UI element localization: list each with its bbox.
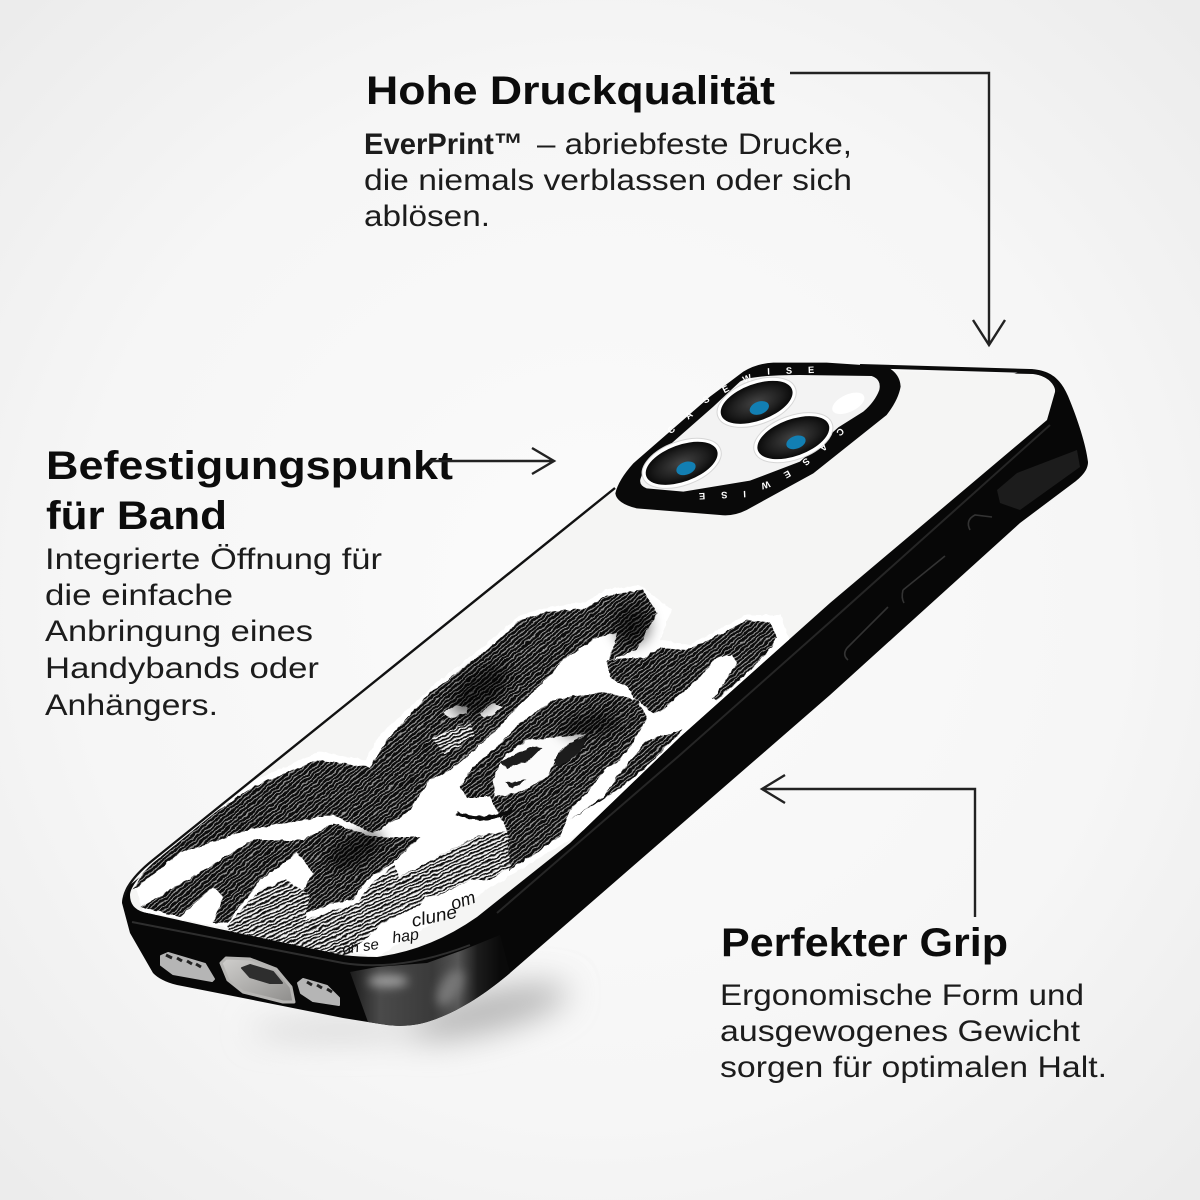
body text: Handybands oder xyxy=(45,652,319,685)
back left edge line xyxy=(124,488,615,897)
monster mouth xyxy=(432,722,475,755)
heading xyxy=(46,444,453,538)
lower scribbled text xyxy=(343,894,475,954)
lower wing xyxy=(140,823,420,923)
girl face xyxy=(493,733,587,797)
monster and upper wing xyxy=(133,590,657,890)
brand ring text: CASEWISE xyxy=(669,366,814,433)
body text: – abriebfeste Drucke, xyxy=(537,128,852,161)
collar xyxy=(457,810,513,818)
body text: EverPrint™ xyxy=(364,128,523,161)
lenses xyxy=(635,368,840,498)
camera island xyxy=(615,362,901,516)
lower scribbled text: hap xyxy=(391,926,420,947)
sleeve hatching xyxy=(570,730,683,820)
case body xyxy=(122,369,1088,1026)
body text: die niemals verblassen oder sich xyxy=(364,164,852,197)
lower scribbled text: clune xyxy=(410,902,459,931)
body text: Anhängers. xyxy=(45,689,218,722)
heading: Hohe Druckqualität xyxy=(366,69,775,113)
phone case illustration xyxy=(122,362,1088,1026)
girl hair xyxy=(460,692,647,870)
speaker right xyxy=(298,979,339,1005)
flash xyxy=(829,388,868,419)
bottom face reflection xyxy=(350,938,510,1026)
side buttons xyxy=(845,450,1080,660)
speaker left xyxy=(161,953,214,981)
lower scribbled text: om xyxy=(448,887,478,914)
camera opening xyxy=(640,375,880,492)
girl features xyxy=(500,737,587,788)
phone shadow xyxy=(250,972,572,1052)
body text xyxy=(45,543,382,722)
monster eyes xyxy=(443,703,502,718)
bottom bevel line xyxy=(132,922,470,965)
brand ring text: CASEWISE xyxy=(699,428,844,500)
body text: sorgen für optimalen Halt. xyxy=(720,1051,1107,1084)
artwork halo xyxy=(135,585,790,957)
callout: grip xyxy=(720,921,1107,1084)
body text: die einfache xyxy=(45,579,233,612)
wing gap xyxy=(667,655,738,707)
body text xyxy=(364,128,852,233)
lower skirt hatching xyxy=(227,865,430,958)
back top edge line xyxy=(860,366,1058,392)
side bevel line xyxy=(497,425,1050,913)
brand ring text xyxy=(669,366,844,500)
printed artwork xyxy=(133,585,790,958)
heading: Befestigungspunkt xyxy=(46,444,453,488)
ink shadows xyxy=(322,605,650,877)
heading: für Band xyxy=(46,494,227,538)
dress hatching xyxy=(398,831,510,898)
charging port xyxy=(221,958,294,1002)
arrow: attachment point xyxy=(430,448,554,474)
ports xyxy=(161,953,339,1005)
body text: Anbringung eines xyxy=(45,615,313,648)
arrow: grip xyxy=(762,775,975,917)
body text: Ergonomische Form und xyxy=(720,979,1084,1012)
arrow: print quality xyxy=(790,73,1005,345)
right wing xyxy=(607,620,777,713)
callout: print quality xyxy=(364,69,852,233)
heading: Perfekter Grip xyxy=(721,921,1008,965)
back face xyxy=(130,371,1055,957)
callout: attachment point xyxy=(45,444,453,722)
body text xyxy=(720,979,1107,1084)
body text: Integrierte Öffnung für xyxy=(45,543,382,576)
body text: ablösen. xyxy=(364,200,490,233)
lower scribbled text: on se xyxy=(341,936,380,958)
body text: ausgewogenes Gewicht xyxy=(720,1015,1081,1048)
